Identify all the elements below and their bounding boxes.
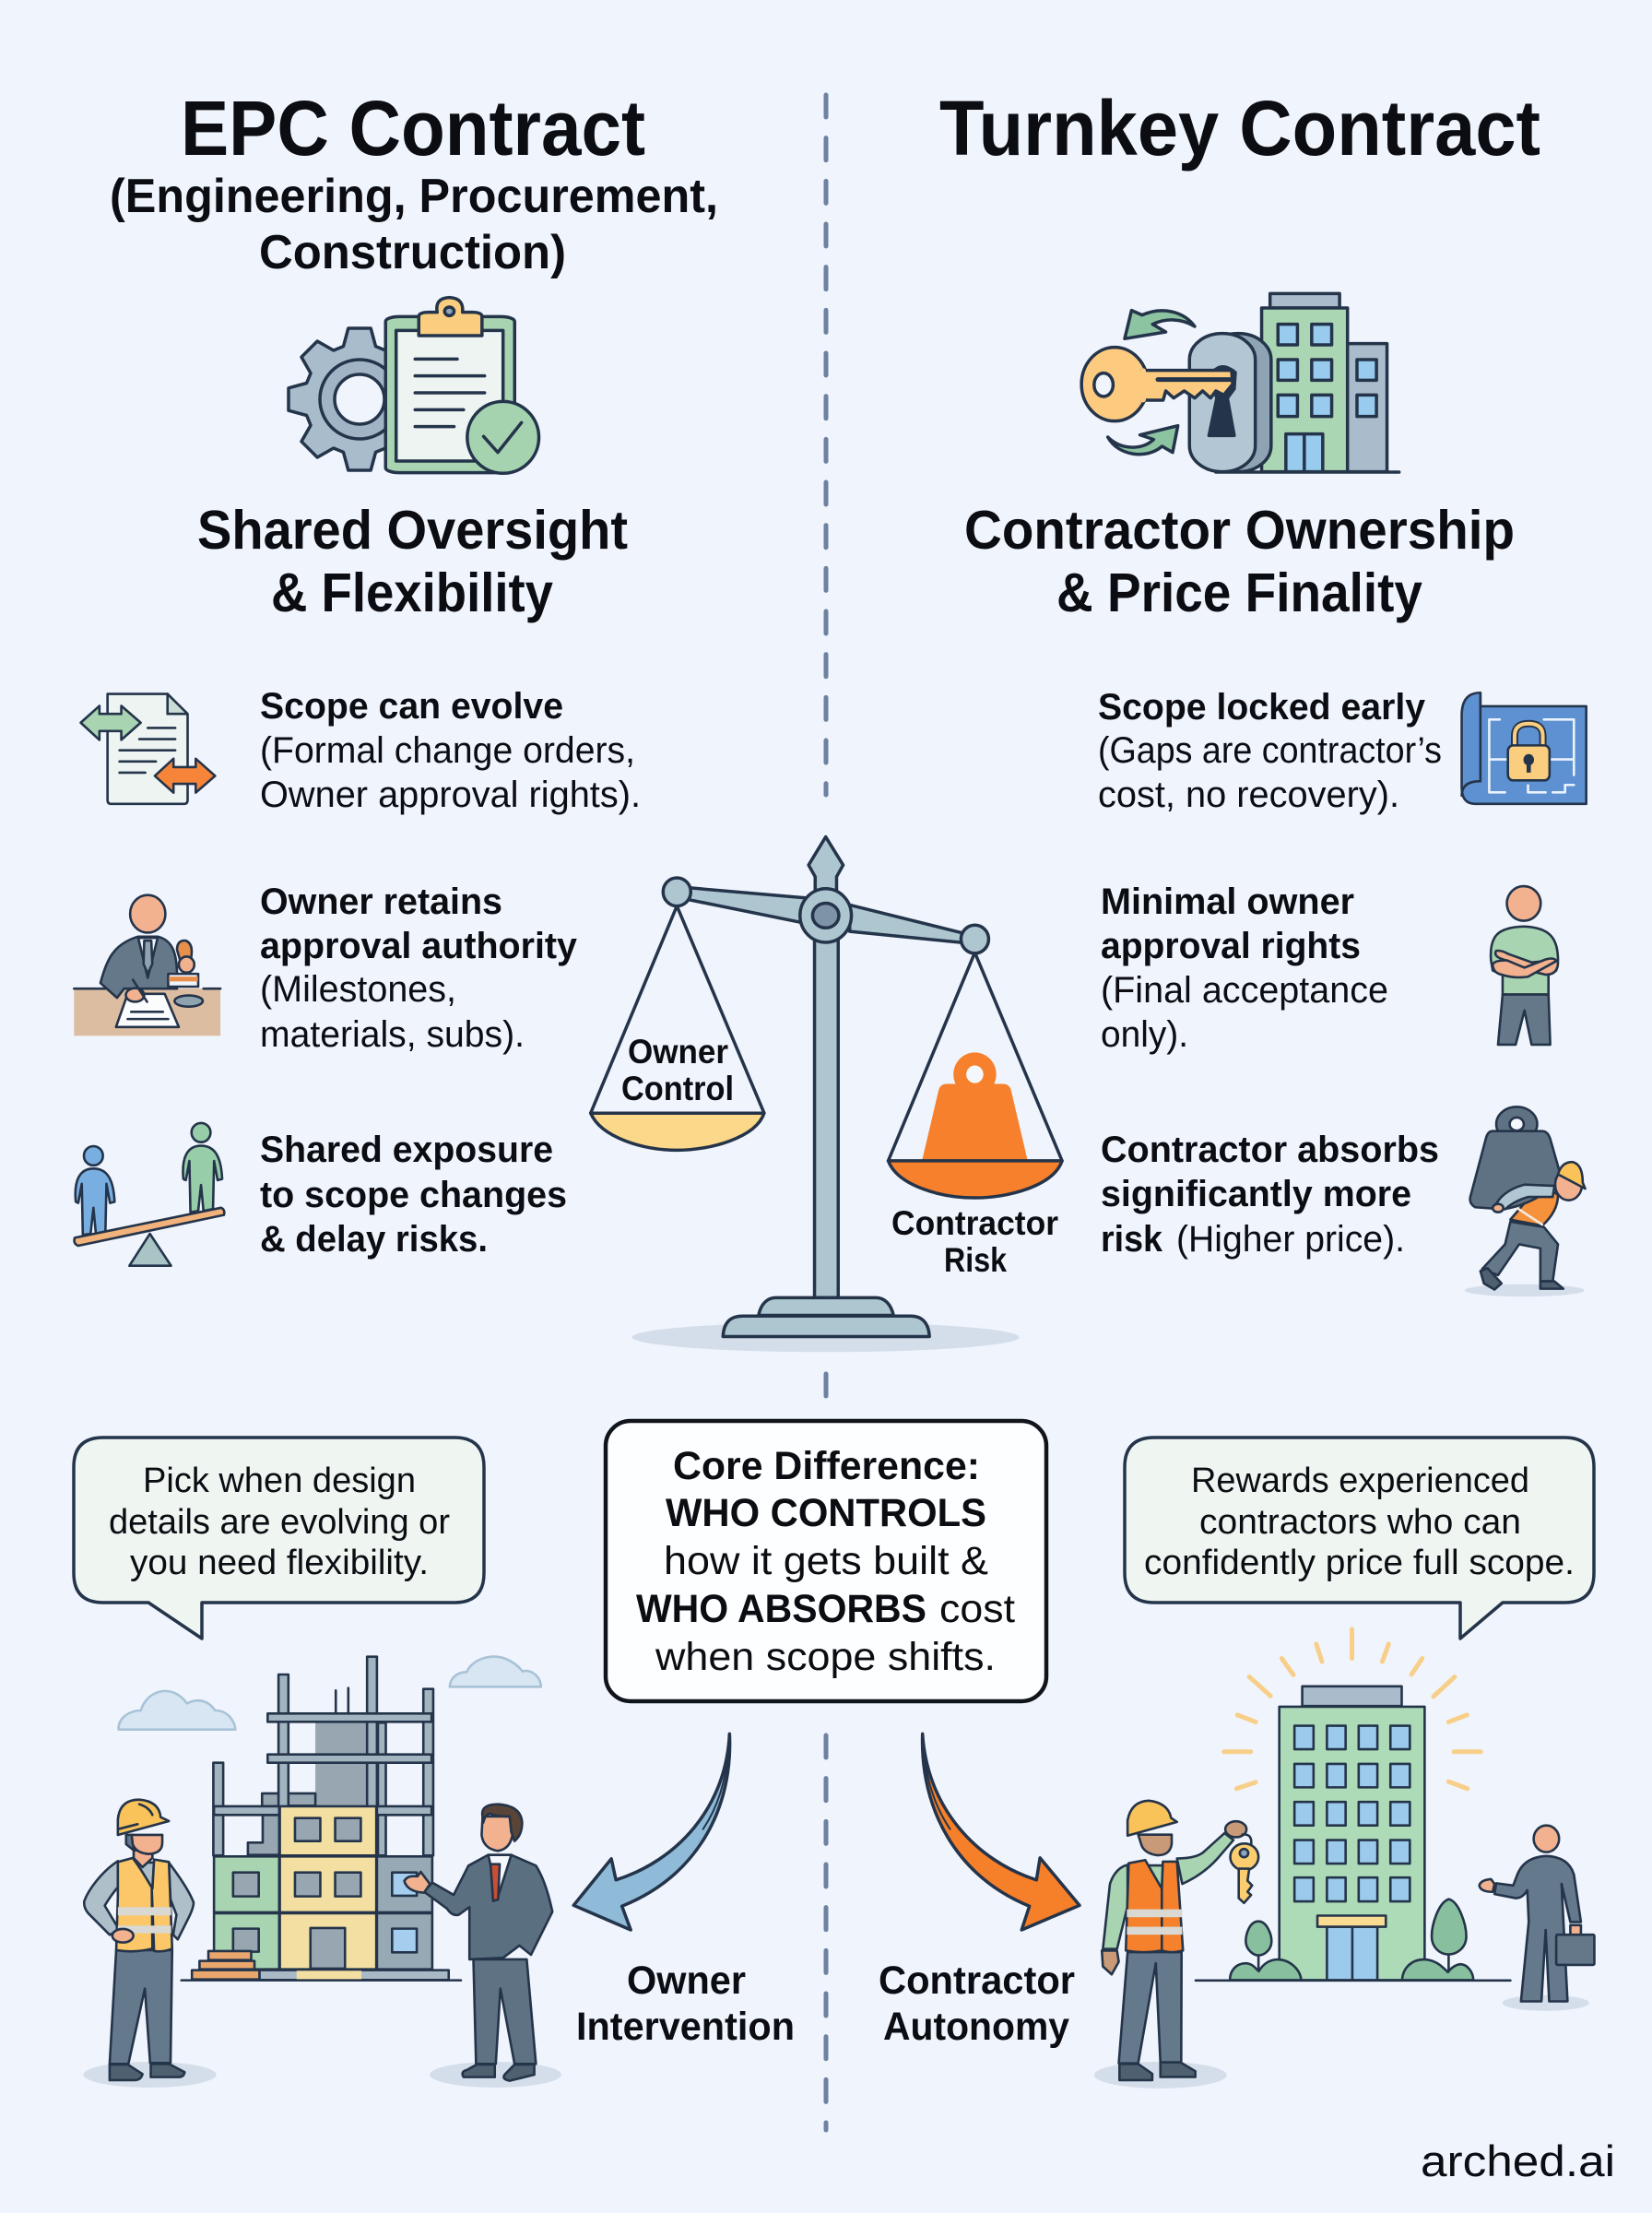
figure: owner in suit [405, 1805, 561, 2088]
figure: owner with briefcase [1480, 1826, 1594, 2011]
figure: worker in yellow vest [83, 1800, 217, 2088]
callout: core difference: when scope shifts. [655, 1635, 996, 1679]
label: Contractor Risk: Contractor [891, 1204, 1058, 1242]
label: Contractor Autonomy [879, 1959, 1075, 2049]
label: Owner Control: Owner [628, 1033, 728, 1071]
text: scope locked early [1098, 687, 1442, 815]
label: Contractor Autonomy: Contractor [879, 1959, 1075, 2003]
icon: key in lock with building [1081, 293, 1399, 472]
title: EPC Contract: Construction) [259, 226, 566, 279]
text: owner retains approval authority: materials, subs). [260, 1014, 525, 1055]
label: Owner Intervention: Intervention [576, 2005, 795, 2049]
chart: balance scale [591, 837, 1062, 1352]
heading: Contractor Ownership & Price Finality: Contractor Ownership [964, 500, 1515, 561]
text: scope can evolve: Scope can evolve [260, 686, 563, 727]
label: Contractor Risk: Risk [944, 1241, 1007, 1279]
callout: pick when design details are evolving: you need flexibility. [130, 1544, 429, 1582]
text: owner retains approval authority [260, 882, 578, 1055]
text: minimal owner approval rights: (Final acceptance [1101, 970, 1388, 1011]
title: EPC Contract: EPC Contract [181, 85, 645, 172]
icon: clouds [119, 1657, 541, 1730]
text: minimal owner approval rights: only). [1101, 1014, 1188, 1055]
icon: locked blueprint [1462, 692, 1587, 804]
label: Owner Control [621, 1033, 734, 1107]
label: Owner Intervention: Owner [627, 1959, 746, 2003]
figure: contractor holding key [1094, 1801, 1258, 2089]
title: EPC Contract [110, 85, 718, 279]
icon: change order document [81, 694, 215, 804]
text: minimal owner approval rights [1101, 882, 1388, 1055]
callout: core difference: WHO ABSORBS [636, 1587, 926, 1631]
callout: core difference: WHO CONTROLS [666, 1491, 986, 1535]
text: scope can evolve: (Formal change orders, [260, 730, 635, 771]
label: Contractor Risk [891, 1204, 1058, 1279]
arrow: contractor autonomy [923, 1734, 1080, 1930]
icon: owner signing at desk [74, 895, 220, 1035]
text: owner retains approval authority: (Milestones, [260, 969, 456, 1010]
callout: core difference: Core Difference: [673, 1444, 980, 1488]
text: shared exposure: & delay risks. [260, 1219, 488, 1260]
text: shared exposure: to scope changes [260, 1175, 567, 1215]
callout: core difference [606, 1421, 1046, 1701]
icon: glow rays [1224, 1629, 1481, 1789]
text: owner retains approval authority: approval authority [260, 926, 578, 966]
text: scope can evolve: Owner approval rights). [260, 775, 641, 815]
arrow: owner intervention [573, 1734, 730, 1930]
illustration: construction site with worker and owner [83, 1657, 561, 2088]
callout: pick when design details are evolving: details are evolving or [109, 1503, 450, 1542]
callout: rewards experienced contractors: contractors who can [1199, 1503, 1521, 1542]
text: owner retains approval authority: Owner retains [260, 882, 502, 922]
text: minimal owner approval rights: approval rights [1101, 926, 1361, 966]
text: contractor absorbs risk: risk [1101, 1219, 1163, 1260]
icon: worker carrying weight [1465, 1106, 1586, 1296]
heading: Contractor Ownership & Price Finality [964, 500, 1515, 623]
callout: core difference: cost [939, 1587, 1015, 1631]
heading: Shared Oversight & Flexibility [197, 500, 628, 623]
label: Contractor Autonomy: Autonomy [883, 2005, 1069, 2049]
text: scope locked early: Scope locked early [1098, 687, 1426, 728]
callout: pick when design details are evolving [74, 1438, 484, 1639]
title: EPC Contract: (Engineering, Procurement, [110, 170, 718, 223]
illustration: finished building with key handover [1094, 1629, 1594, 2089]
callout: rewards experienced contractors: Rewards experienced [1191, 1462, 1529, 1500]
icon: gear and clipboard [289, 298, 539, 473]
text: contractor absorbs risk [1101, 1130, 1439, 1260]
heading: Shared Oversight & Flexibility: Shared Oversight [197, 500, 628, 561]
watermark: arched.ai: arched.ai [1421, 2136, 1615, 2185]
text: shared exposure [260, 1130, 567, 1260]
text: contractor absorbs risk: Contractor absorbs [1101, 1130, 1439, 1170]
text: scope can evolve [260, 686, 641, 815]
heading: Contractor Ownership & Price Finality: & Price Finality [1056, 562, 1422, 623]
building under construction [182, 1657, 461, 1981]
callout: rewards experienced contractors: confidently price full scope. [1144, 1544, 1575, 1582]
text: shared exposure: Shared exposure [260, 1130, 553, 1170]
icon: seesaw with two people [75, 1123, 224, 1266]
finished building [1196, 1686, 1510, 1981]
callout: core difference: how it gets built & [664, 1539, 988, 1583]
heading: Shared Oversight & Flexibility: & Flexibility [271, 562, 553, 623]
label: Owner Control: Control [621, 1070, 734, 1107]
text: scope locked early: cost, no recovery). [1098, 775, 1399, 815]
text: contractor absorbs risk: (Higher price). [1176, 1219, 1405, 1260]
icon: owner with crossed arms [1491, 886, 1558, 1045]
callout: rewards experienced contractors [1125, 1438, 1594, 1639]
text: scope locked early: (Gaps are contractor’s [1098, 730, 1442, 771]
callout: pick when design details are evolving: Pick when design [143, 1462, 416, 1500]
text: minimal owner approval rights: Minimal owner [1101, 882, 1354, 922]
title: Turnkey Contract: Turnkey Contract [939, 85, 1540, 172]
label: Owner Intervention [576, 1959, 795, 2049]
text: contractor absorbs risk: significantly more [1101, 1174, 1411, 1214]
